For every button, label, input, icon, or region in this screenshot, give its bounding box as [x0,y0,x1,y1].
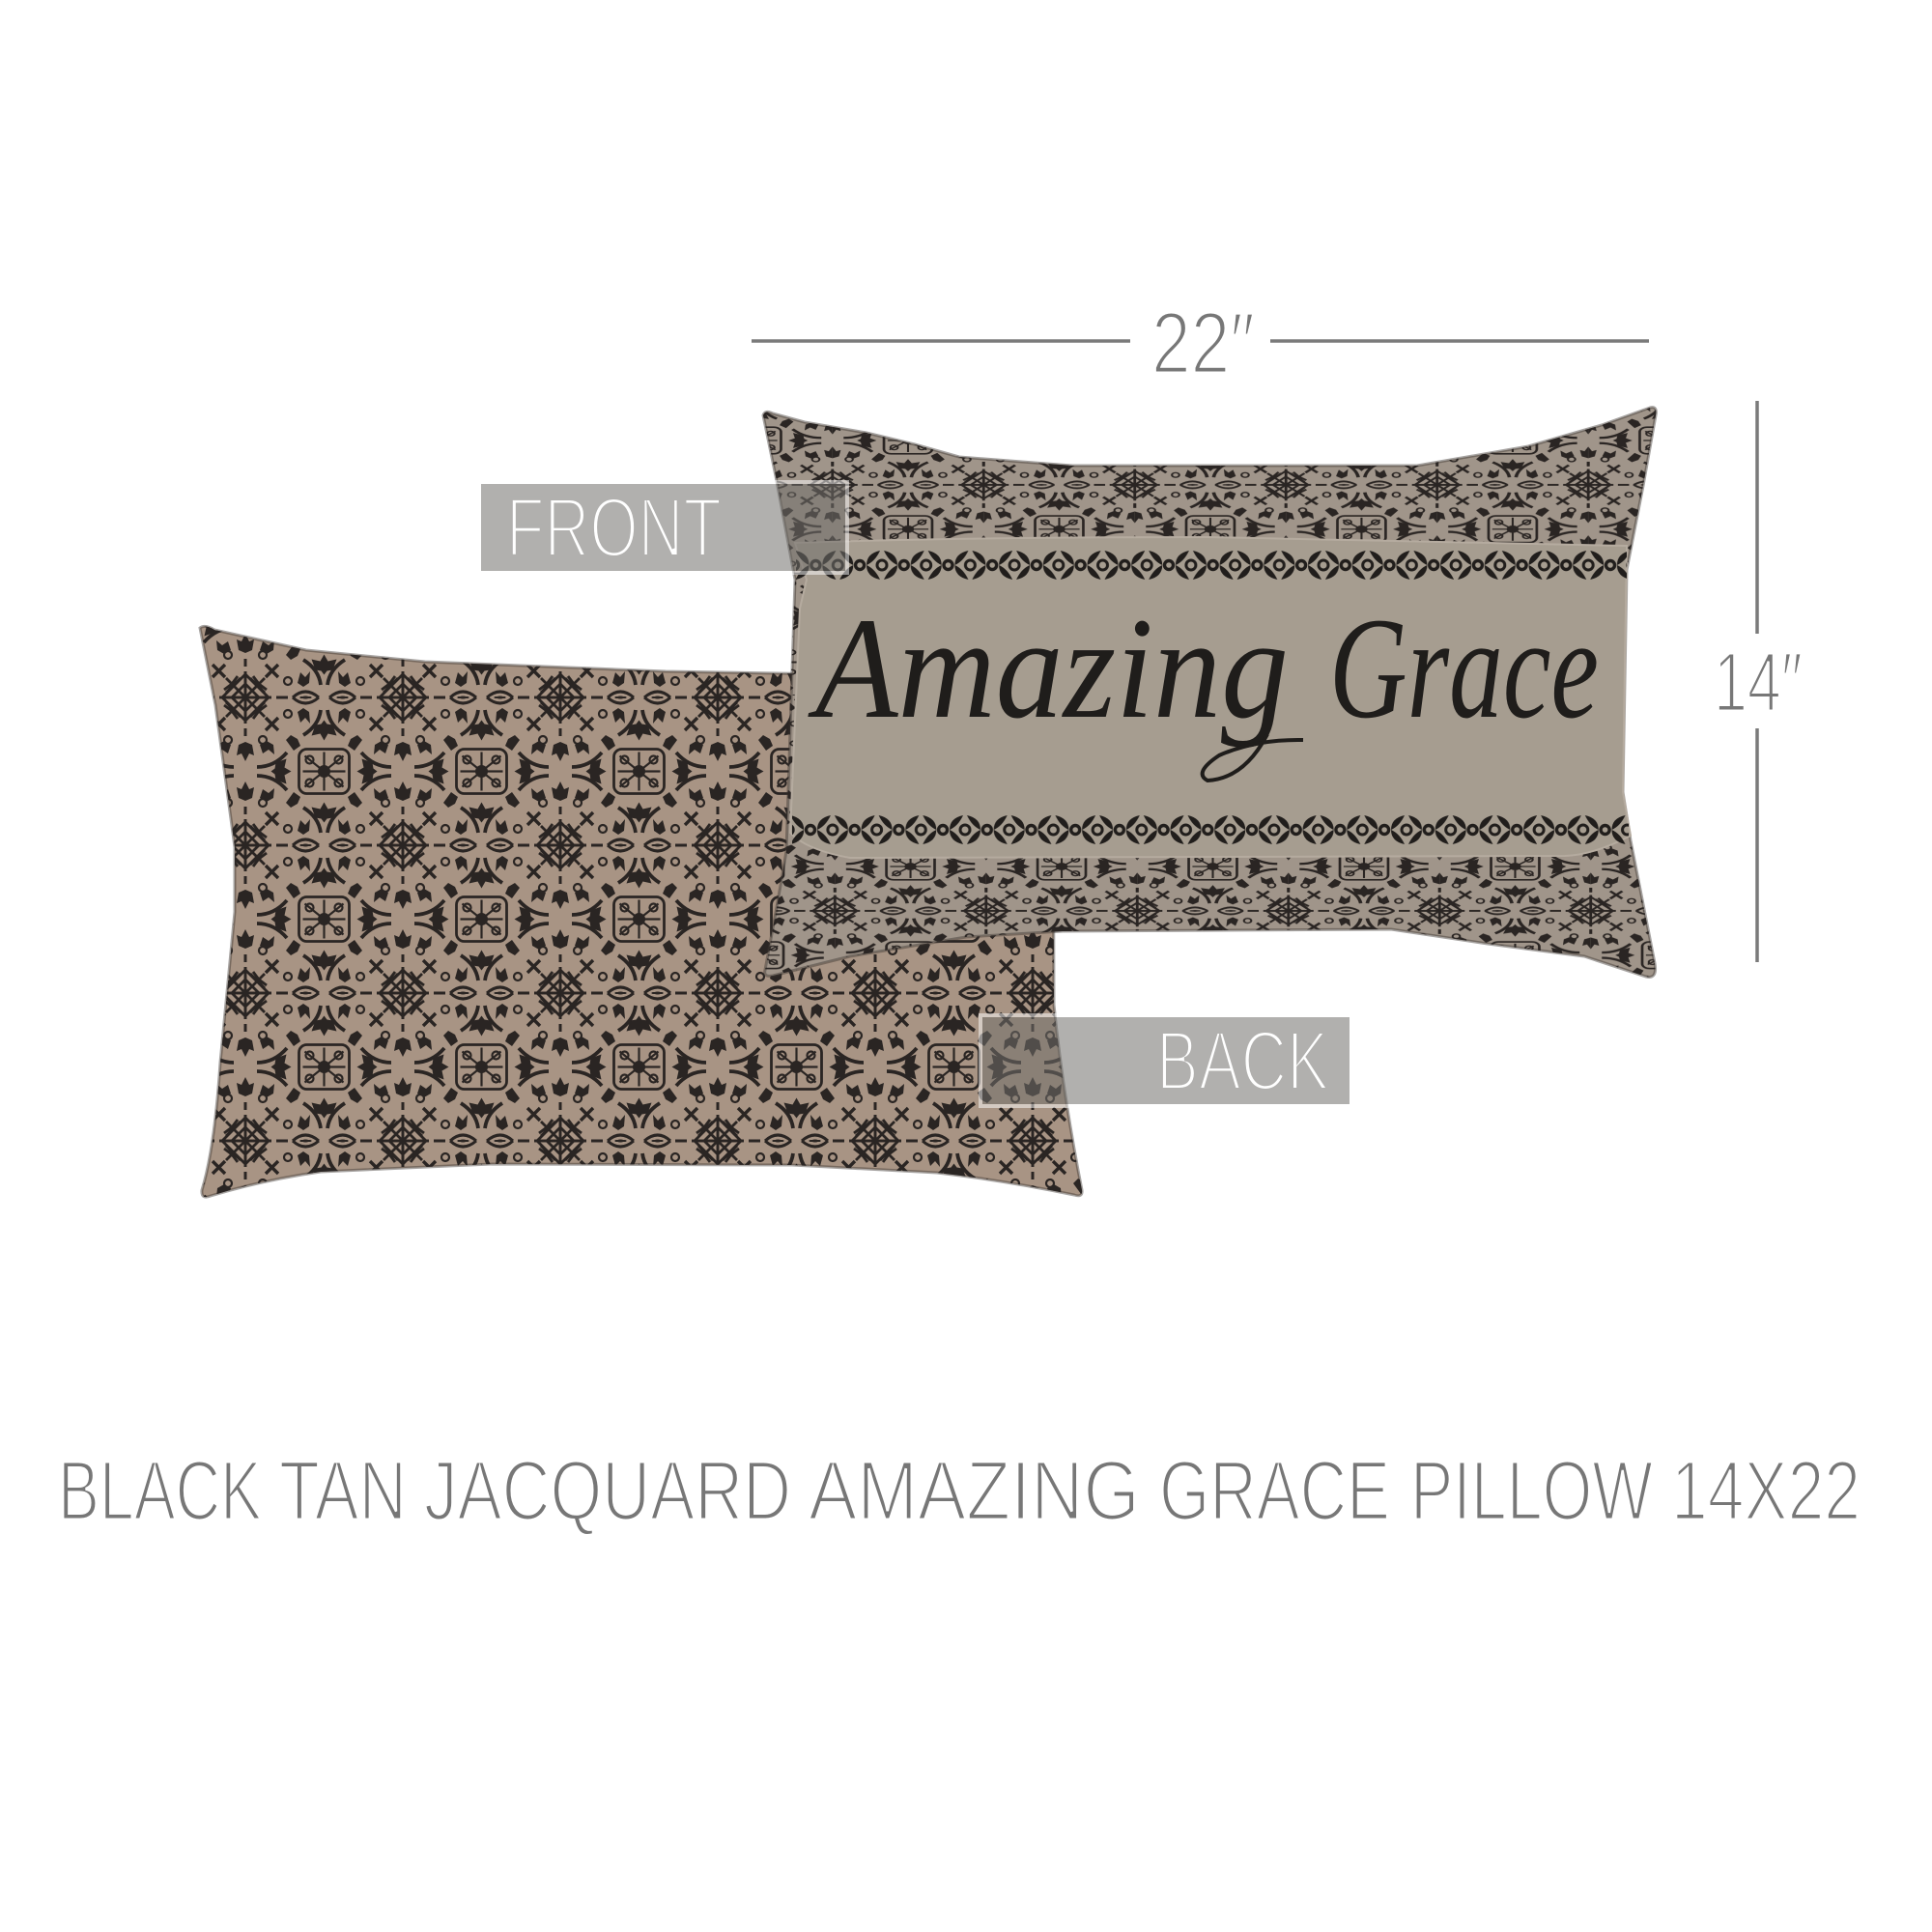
width dimension: 22 inches: 22″ [1151,296,1255,392]
bottom decorative strip [792,812,1629,847]
front pillow [763,408,1656,977]
amazing grace lettering: Grace [1329,588,1599,749]
back label [980,1014,1351,1108]
amazing grace lettering [808,588,1599,781]
product title: AMAZING [809,1444,1140,1538]
front label: FRONT [506,481,722,575]
product title: GRACE [1159,1444,1390,1538]
front pillow body with patterned border [763,408,1656,977]
product title: 14X22 [1671,1444,1861,1538]
product title: PILLOW [1410,1444,1653,1538]
product title [58,1444,1861,1538]
back label: BACK [1156,1014,1329,1108]
height dimension: 14 inches: 14″ [1714,636,1803,729]
product title: BLACK [58,1444,262,1538]
product title: TAN [279,1444,407,1538]
back pillow [200,626,1082,1197]
infographic canvas [64,313,1857,1534]
top decorative strip [796,548,1627,582]
amazing grace lettering: Amazing [808,588,1289,749]
center linen band [790,537,1631,858]
product title: JACQUARD [424,1444,791,1538]
